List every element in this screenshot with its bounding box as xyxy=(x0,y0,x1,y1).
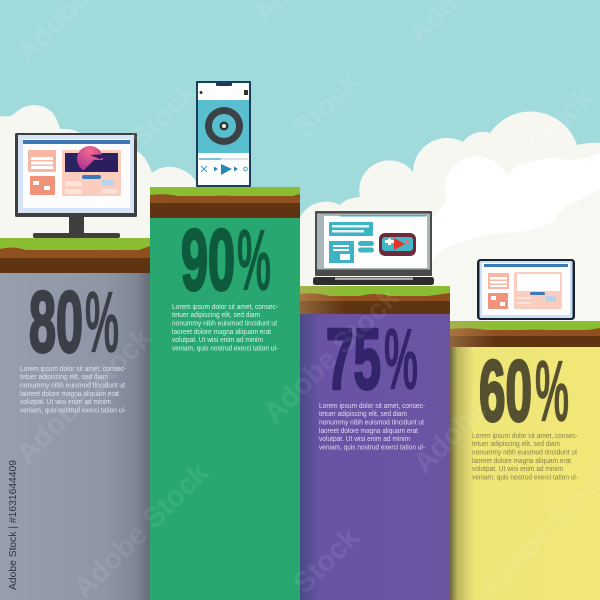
body text: veniam, quis nostrud exerci tation ul- xyxy=(472,472,578,482)
body text: volutpat. Ut wisi enim ad minim xyxy=(472,464,563,473)
percentage: 80 xyxy=(29,274,83,370)
body text: Lorem ipsum dolor sit amet, consec- xyxy=(472,431,578,440)
percentage: 60 xyxy=(479,344,532,440)
watermark: Adobe Stock xyxy=(452,81,600,230)
icon: laptop xyxy=(313,211,434,285)
body text: veniam, quis nostrud exerci tation ul- xyxy=(20,406,126,414)
watermark: Stock xyxy=(287,521,366,600)
column: gray 80%: % xyxy=(85,275,119,371)
percentage: 75 xyxy=(326,312,381,408)
column: green 90% xyxy=(150,187,300,600)
watermark: Adobe Stock xyxy=(257,281,406,430)
clouds right xyxy=(300,112,600,330)
body text: Lorem ipsum dolor sit amet, consec- xyxy=(172,302,278,311)
body text xyxy=(172,302,278,352)
body text: nonummy nibh euismod tincidunt ut xyxy=(472,448,578,456)
stock id caption: Adobe Stock | #1631644409 xyxy=(8,460,19,590)
body text: nonummy nibh euismod tincidunt ut xyxy=(172,318,278,328)
percentage: 90 xyxy=(181,212,235,308)
clouds left xyxy=(0,105,254,240)
icon: smartphone music player xyxy=(196,81,251,187)
icon: desktop monitor xyxy=(15,133,137,238)
soil and grass xyxy=(300,286,450,314)
body text xyxy=(319,401,425,452)
watermark: Stock xyxy=(124,76,203,155)
body text: laoreet dolore magna aliquam erat xyxy=(472,456,572,465)
body text: laoreet dolore magna aliquam erat xyxy=(172,327,272,336)
body text: Lorem ipsum dolor sit amet, consec- xyxy=(319,401,425,410)
body text xyxy=(472,431,578,482)
body text: nonummy nibh euismod tincidunt ut xyxy=(20,380,126,390)
body text: tetuer adipiscing elit, sed diam xyxy=(319,409,407,418)
column body xyxy=(300,314,450,600)
column: purple 75% xyxy=(300,286,450,600)
body text: Lorem ipsum dolor sit amet, consec- xyxy=(20,364,126,373)
body text xyxy=(20,364,126,414)
body text: nonummy nibh euismod tincidunt ut xyxy=(319,418,425,426)
body text: veniam, quis nostrud exerci tation ul- xyxy=(319,442,425,452)
soil and grass xyxy=(0,238,150,273)
body text: veniam, quis nostrud exerci tation ul- xyxy=(172,344,278,352)
column: yellow 60% xyxy=(450,321,600,600)
watermark: Adobe Stock xyxy=(10,321,159,470)
column: purple 75%: % xyxy=(384,312,418,408)
watermark: Adobe xyxy=(407,394,494,480)
body text: laoreet dolore magna aliquam erat xyxy=(319,426,419,435)
icon: tablet xyxy=(477,259,575,320)
body text: tetuer adipiscing elit, sed diam xyxy=(472,439,560,448)
column: gray 80% xyxy=(0,238,150,600)
body text: volutpat. Ut wisi enim ad minim xyxy=(172,335,263,344)
column body xyxy=(150,218,300,600)
column body xyxy=(0,273,150,600)
column body xyxy=(450,347,600,600)
watermark: Stock xyxy=(287,66,366,145)
body text: tetuer adipiscing elit, sed diam xyxy=(20,372,108,381)
soil and grass xyxy=(450,321,600,347)
body text: laoreet dolore magna aliquam erat xyxy=(20,389,120,398)
body text: tetuer adipiscing elit, sed diam xyxy=(172,310,260,319)
body text: volutpat. Ut wisi enim ad minim xyxy=(319,434,410,443)
soil and grass xyxy=(150,187,300,218)
body text: volutpat. Ut wisi enim ad minim xyxy=(20,397,111,406)
column: green 90%: % xyxy=(237,213,271,309)
